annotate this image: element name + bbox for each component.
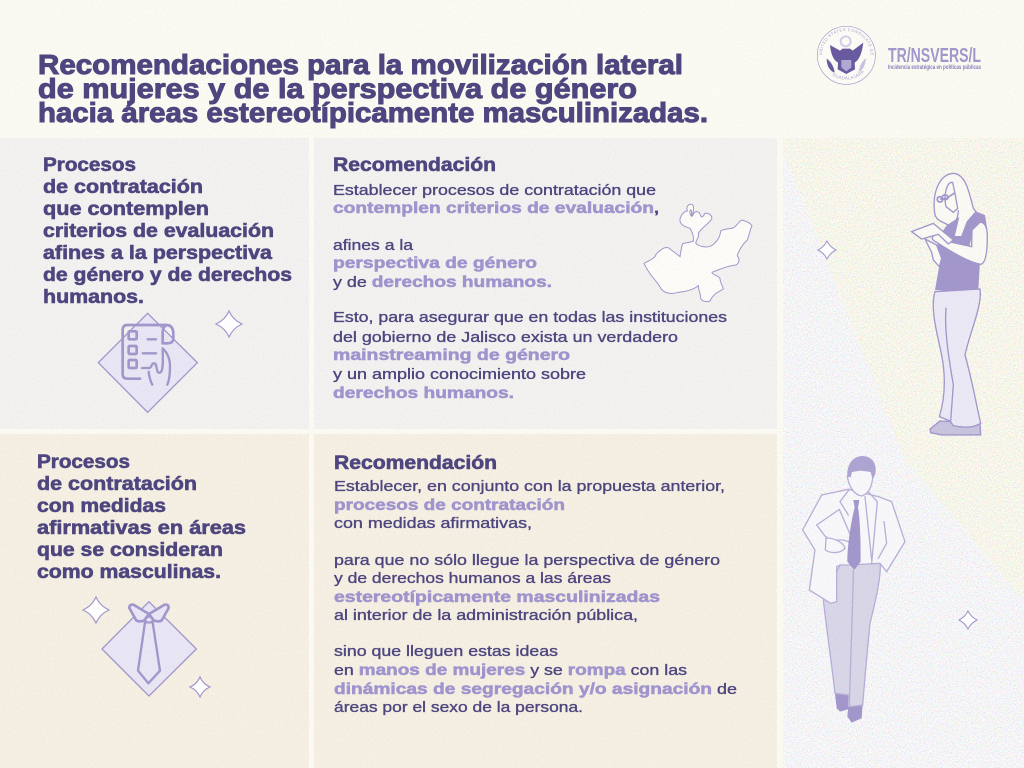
heading: hiring processes 1: [43, 155, 292, 308]
heading: hiring processes 1: de género y de derechos: [43, 265, 292, 286]
text: recommendation 1 body: derechos humanos.: [333, 385, 514, 402]
logo: consulate seal: [817, 26, 876, 85]
text: recommendation 1 body: y de derechos humanos.: [333, 274, 552, 291]
icon: sparkle: [190, 677, 210, 697]
text: recommendation 1 body: perspectiva de género: [333, 255, 537, 272]
title: hacia áreas estereotípicamente masculinizadas.: [38, 97, 708, 128]
text: recommendation 1 body: mainstreaming de género: [333, 347, 570, 364]
heading: hiring processes 2: [37, 452, 246, 583]
panel: right illustration column: [783, 138, 1024, 768]
text: recommendation 2 body: [334, 478, 737, 716]
text: recommendation 2 body: procesos de contratación: [334, 497, 565, 514]
logo: Transversal: [888, 45, 981, 71]
title: [38, 49, 708, 128]
title: Recomendaciones para la movilización lateral: [38, 49, 683, 80]
text: recommendation 1 body: [333, 182, 727, 402]
text: recommendation 1 body: contemplen criterios de evaluación ,: [333, 200, 659, 217]
text: recommendation 2 body: en manos de mujeres y se rompa con las: [334, 662, 687, 679]
text: recommendation 2 body: estereotípicamente masculinizadas: [334, 589, 660, 606]
heading: hiring processes 2: que se consideran: [37, 540, 223, 561]
text: recommendation 1 body: Esto, para asegurar que en todas las instituciones: [333, 309, 727, 326]
text: recommendation 2 body: áreas por el sexo de la persona.: [334, 699, 583, 716]
icon: map of Jalisco: [644, 204, 752, 302]
logo: Transversal: TR/NSVERS/L: [888, 45, 981, 67]
text: recommendation 2 body: con medidas afirmativas,: [334, 515, 532, 532]
text: recommendation 1 body: y un amplio conocimiento sobre: [333, 366, 586, 383]
heading: hiring processes 2: Procesos: [37, 452, 130, 473]
heading: hiring processes 1: que contemplen: [43, 199, 209, 220]
text: recommendation 1 body: Establecer procesos de contratación que: [333, 182, 656, 199]
panel: hiring processes 1: [0, 138, 309, 429]
heading: hiring processes 2: de contratación: [37, 474, 197, 495]
heading: hiring processes 1: afines a la perspectiva: [43, 243, 272, 264]
heading: hiring processes 1: criterios de evaluación: [43, 221, 274, 242]
heading: hiring processes 1: Procesos: [43, 155, 136, 176]
heading: recommendation 1: Recomendación: [333, 155, 496, 176]
logo: consulate seal: GUADALAJARA: [832, 70, 864, 80]
heading: hiring processes 2: con medidas: [37, 496, 166, 517]
title: de mujeres y de la perspectiva de género: [38, 73, 637, 104]
icon: sparkle: [216, 311, 242, 337]
text: recommendation 2 body: Establecer, en conjunto con la propuesta anterior,: [334, 478, 725, 495]
logo: Transversal: Incidencia estratégica en políticas públicas: [888, 64, 981, 71]
heading: hiring processes 1: humanos.: [43, 287, 144, 308]
logo: consulate seal: UNITED STATES CONSULATE GENERAL: [819, 28, 874, 56]
heading: recommendation 2: Recomendación: [334, 453, 497, 474]
icon: sparkle: [818, 241, 836, 259]
icon: sparkle: [959, 611, 977, 629]
illustration: woman reading: [912, 173, 987, 435]
text: recommendation 2 body: para que no sólo llegue la perspectiva de género: [334, 552, 720, 569]
icon: checklist in diamond: [98, 313, 197, 412]
text: recommendation 1 body: afines a la: [333, 237, 414, 254]
icon: tie in diamond: [102, 602, 196, 696]
text: recommendation 2 body: al interior de la administración pública,: [334, 607, 638, 624]
text: recommendation 1 body: del gobierno de Jalisco exista un verdadero: [333, 329, 678, 346]
text: recommendation 2 body: sino que lleguen estas ideas: [334, 643, 558, 660]
icon: sparkle: [83, 597, 109, 623]
heading: hiring processes 1: de contratación: [43, 177, 203, 198]
text: recommendation 2 body: dinámicas de segregación y/o asignación de: [334, 681, 737, 698]
panel: recommendation 1: [314, 138, 777, 429]
text: recommendation 2 body: y de derechos humanos a las áreas: [334, 570, 611, 587]
heading: hiring processes 2: como masculinas.: [37, 562, 221, 583]
panel: recommendation 2: [314, 434, 777, 768]
illustration: man with folder: [803, 456, 905, 723]
heading: hiring processes 2: afirmativas en áreas: [37, 518, 246, 539]
panel: hiring processes 2: [0, 434, 309, 768]
